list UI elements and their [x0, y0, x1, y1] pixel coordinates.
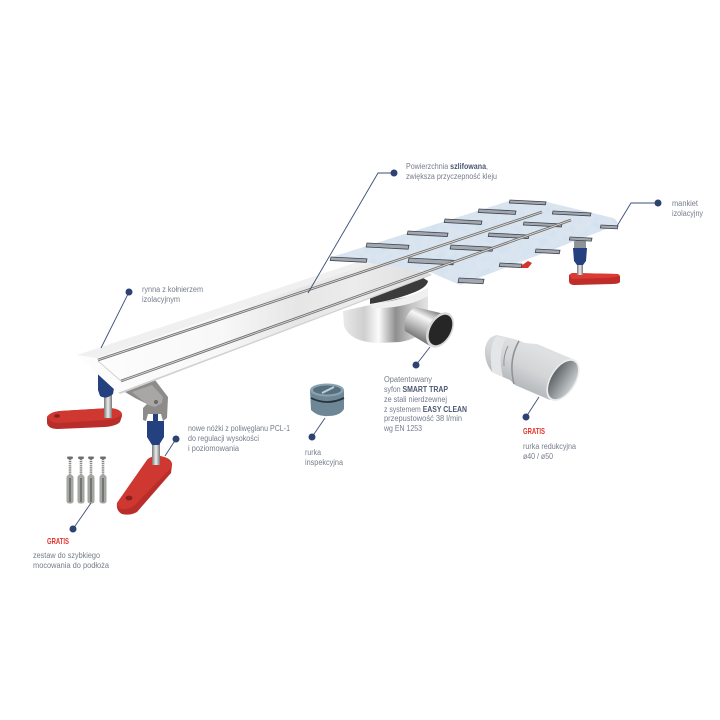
callout: fixing set: zestaw do szybkiego [33, 551, 100, 560]
callout: siphon: wg EN 1253 [383, 424, 422, 433]
callout: inspection pipe [305, 418, 343, 467]
callout: inspection pipe: inspekcyjna [305, 458, 343, 467]
callout: new feet: i poziomowania [188, 444, 240, 453]
callout: new feet [165, 424, 290, 456]
callout: insulating cuff [617, 199, 703, 226]
reduction pipe [485, 335, 586, 407]
callout: siphon: Opatentowany [384, 375, 432, 384]
callout: channel with flange: izolacyjnym [142, 295, 180, 304]
foot: right [569, 240, 620, 285]
siphon outlet pipe [404, 307, 460, 352]
callout: fixing set [33, 503, 110, 570]
insulation membrane [330, 200, 618, 285]
callout: ground surface: Powierzchnia szlifowana, [406, 162, 488, 171]
callout: insulating cuff: mankiet [672, 199, 699, 208]
callout: siphon: przepustowość 38 l/min [384, 414, 462, 423]
callout: siphon: ze stali nierdzewnej [384, 395, 447, 404]
drain slots [98, 212, 571, 381]
callout: siphon [383, 347, 467, 433]
callout: fixing set: mocowania do podłoża [33, 561, 110, 570]
callout: siphon: z systemem EASY CLEAN [384, 405, 467, 414]
callout: reduction pipe: ø40 / ø50 [523, 452, 553, 461]
manufacturer marks on the membrane [330, 200, 618, 284]
callout: new feet: nowe nóżki z poliwęglanu PCL-1 [188, 424, 290, 433]
screws and wall plugs [66, 456, 106, 504]
callout: insulating cuff: izolacyjny [672, 209, 703, 218]
callout: channel with flange [101, 285, 203, 348]
callout: reduction pipe: rurka redukcyjna [523, 442, 576, 451]
callout: reduction pipe: GRATIS [523, 426, 545, 436]
callout: fixing set: GRATIS [47, 536, 69, 546]
callout: channel with flange: rynna z kołnierzem [142, 285, 203, 294]
linear drain channel [77, 258, 432, 394]
callout: ground surface: zwiększa przyczepność kleju [406, 172, 497, 181]
callout: reduction pipe [522, 397, 576, 461]
callout: ground surface [308, 162, 497, 293]
inspection pipe [310, 384, 344, 416]
siphon SMART TRAP [343, 276, 460, 352]
callout: siphon: syfon SMART TRAP [384, 385, 449, 394]
foot: left [47, 372, 122, 429]
small red foot behind the membrane [518, 261, 532, 268]
callout: inspection pipe: rurka [305, 448, 321, 457]
callout: new feet: do regulacji wysokości [188, 434, 259, 443]
foot: centre with grey bracket [117, 380, 172, 515]
